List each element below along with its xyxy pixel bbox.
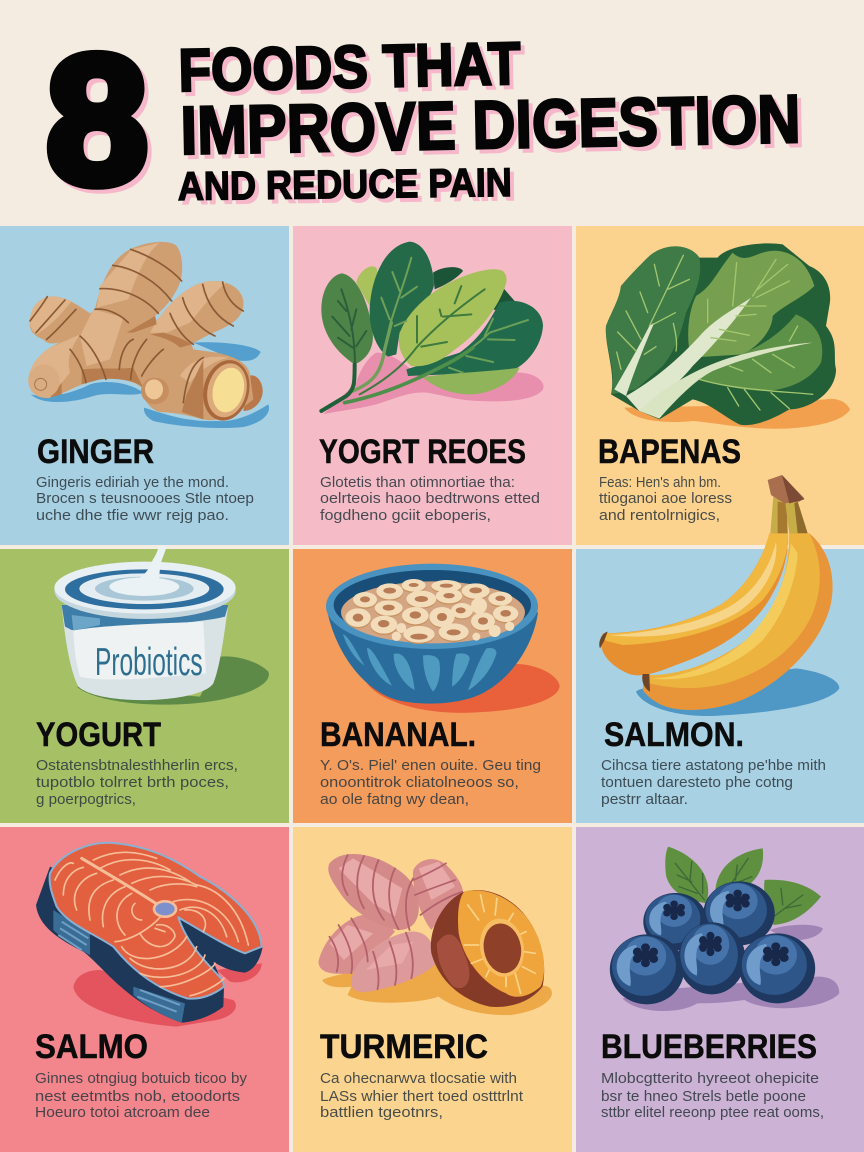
- description: [320, 474, 540, 524]
- description: tontuen daresteto phe cotng: [601, 774, 793, 791]
- heading: SALMON.: [604, 716, 744, 754]
- panel background: [0, 549, 289, 823]
- panel background: [0, 226, 289, 545]
- description: Y. O's. Piel' enen ouite. Geu ting: [320, 757, 541, 774]
- description: ttioganoi aoe loress: [599, 490, 732, 507]
- panel: spinach: [293, 226, 572, 545]
- description: [35, 1070, 247, 1121]
- panel: yogurt: [0, 546, 289, 823]
- title block: [46, 18, 801, 222]
- description: oelrteois haoo bedtrwons etted: [320, 490, 540, 507]
- icon: yogurt cup: [54, 546, 269, 705]
- description: bsr te hneo Strels betle poone: [601, 1088, 806, 1105]
- description: [601, 1070, 824, 1121]
- description: Ginnes otngiug botuicb ticoo by: [35, 1070, 247, 1087]
- description: battlien tgeotnrs,: [320, 1104, 443, 1121]
- panel background: [293, 549, 572, 823]
- title line 3: AND REDUCE PAIN: [178, 161, 512, 209]
- description: uche dhe tfie wwr rejg pao.: [36, 507, 229, 524]
- panel: cereal bowl: [293, 549, 572, 823]
- description: Hoeuro totoi atcroam dee: [35, 1104, 210, 1121]
- description: Glotetis than otimnortiae tha:: [320, 474, 515, 491]
- panel background: [576, 549, 864, 823]
- panel background: [576, 827, 864, 1152]
- heading: TURMERIC: [320, 1028, 488, 1066]
- heading: YOGURT: [36, 716, 161, 754]
- icon: bowl of cereal: [326, 564, 560, 713]
- big number 8: 8: [46, 18, 148, 222]
- icon: spinach leaves: [321, 242, 544, 414]
- panel background: [576, 226, 864, 545]
- heading: YOGRT REOES: [319, 433, 526, 471]
- icon: blueberries: [610, 847, 839, 1011]
- description: Gingeris ediriah ye the mond.: [36, 474, 229, 491]
- description: Feas: Hen's ahn bm.: [599, 474, 721, 491]
- panel: bananas: [576, 475, 864, 823]
- description: g poerpogtrics,: [36, 791, 136, 808]
- description: LASs whier thert toed ostttrlnt: [320, 1088, 524, 1105]
- icon: ginger root: [28, 242, 269, 428]
- description: onoontitrok cliatolneoos so,: [320, 774, 519, 791]
- description: fogdheno gciit eboperis,: [320, 507, 491, 524]
- description: nest eetmtbs nob, etoodorts: [35, 1088, 240, 1105]
- heading: BAPENAS: [598, 433, 741, 471]
- description: sttbr elitel reeonp ptee reat ooms,: [601, 1104, 824, 1121]
- heading: BANANAL.: [320, 716, 476, 754]
- heading: GINGER: [37, 433, 154, 471]
- description: Ca ohecnarwva tlocsatie with: [320, 1070, 517, 1087]
- description: Brocen s teusnoooes Stle ntoep: [36, 490, 254, 507]
- heading: BLUEBERRIES: [601, 1028, 817, 1066]
- icon: turmeric roots: [318, 854, 552, 1015]
- description: tupotblo tolrret brth poces,: [36, 774, 229, 791]
- panel: turmeric: [293, 827, 572, 1152]
- icon: leafy chard: [606, 243, 850, 429]
- panel: blueberries: [576, 827, 864, 1152]
- yogurt label text: Probiotics: [95, 640, 203, 684]
- description: and rentolrnigics,: [599, 507, 720, 524]
- panel: ginger: [0, 226, 289, 545]
- heading: SALMO: [35, 1028, 148, 1066]
- description: [601, 757, 826, 808]
- description: [36, 757, 238, 808]
- description: [320, 1070, 524, 1121]
- description: Cihcsa tiere astatong pe'hbe mith: [601, 757, 826, 774]
- icon: bananas: [599, 475, 839, 716]
- panel: leafy greens: [576, 226, 864, 545]
- description: [599, 474, 732, 524]
- description: Ostatensbtnalesthherlin ercs,: [36, 757, 238, 774]
- icon: salmon steak: [36, 843, 263, 1027]
- title line 1: FOODS THAT: [178, 30, 521, 104]
- panel: salmon: [0, 827, 289, 1152]
- panel background: [293, 226, 572, 545]
- panel background: [0, 827, 289, 1152]
- panel background: [293, 827, 572, 1152]
- description: ao ole fatng wy dean,: [320, 791, 469, 808]
- description: Mlobcgtterito hyreeot ohepicite: [601, 1070, 819, 1087]
- description: [320, 757, 541, 808]
- description: pestrr altaar.: [601, 791, 688, 808]
- description: [36, 474, 254, 524]
